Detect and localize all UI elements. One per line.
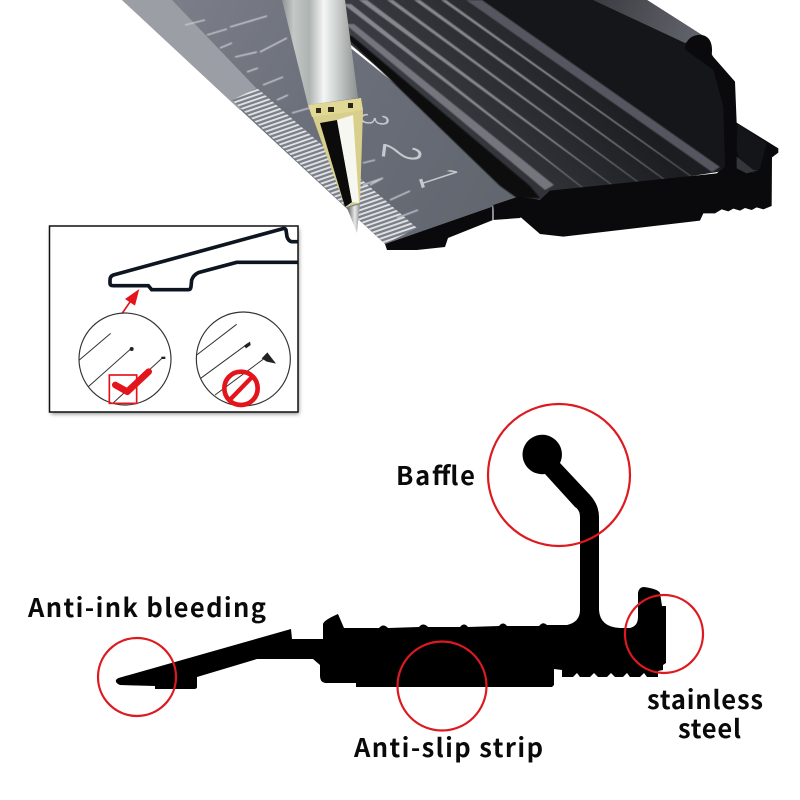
groove highlights bbox=[343, 0, 692, 188]
callout: stainless steel bbox=[625, 595, 763, 746]
callout: baffle bbox=[396, 404, 630, 546]
prohibited sign bbox=[224, 372, 258, 405]
front edge beneath scale bbox=[385, 198, 530, 250]
callout: anti-slip strip: Anti-slip strip bbox=[353, 728, 543, 765]
callout: anti-slip strip bbox=[353, 642, 543, 765]
ruler numerals bbox=[351, 111, 470, 194]
callout: anti-ink bleeding: Anti-ink bleeding bbox=[27, 588, 266, 625]
back ledge bbox=[737, 123, 767, 173]
edge profile outline bbox=[110, 229, 298, 290]
ruler scale surface bbox=[122, 0, 517, 244]
check mark bbox=[109, 372, 149, 403]
magnified bleeding line bbox=[196, 312, 290, 406]
product photo: ruler with pen bbox=[122, 0, 778, 250]
magnified good line bbox=[79, 313, 171, 405]
baffle inner face bbox=[470, 0, 725, 170]
pen bbox=[282, 0, 363, 233]
highlight under baffle bbox=[466, 0, 720, 172]
callout: anti-ink bleeding bbox=[27, 588, 266, 716]
arrow to edge bbox=[121, 289, 139, 315]
callout: stainless steel: steel bbox=[678, 709, 741, 746]
callout: stainless steel: stainless bbox=[647, 680, 763, 717]
callout: baffle: Baffle bbox=[396, 456, 475, 493]
knob, fin, front face bbox=[493, 35, 778, 237]
ruler numerals: 3 bbox=[351, 111, 398, 128]
wide light strip bbox=[345, 24, 554, 190]
grooved top surface bbox=[345, 0, 730, 200]
back ridge of baffle bbox=[593, 0, 702, 43]
ruler numerals: 2 bbox=[368, 140, 434, 164]
cross-section silhouette bbox=[116, 435, 666, 689]
ruler numerals: 1 bbox=[405, 162, 470, 194]
inset diagram: correct vs wrong edge bbox=[50, 226, 299, 414]
black aluminium profile bbox=[343, 0, 778, 250]
dark channel beside scale bbox=[345, 36, 540, 198]
